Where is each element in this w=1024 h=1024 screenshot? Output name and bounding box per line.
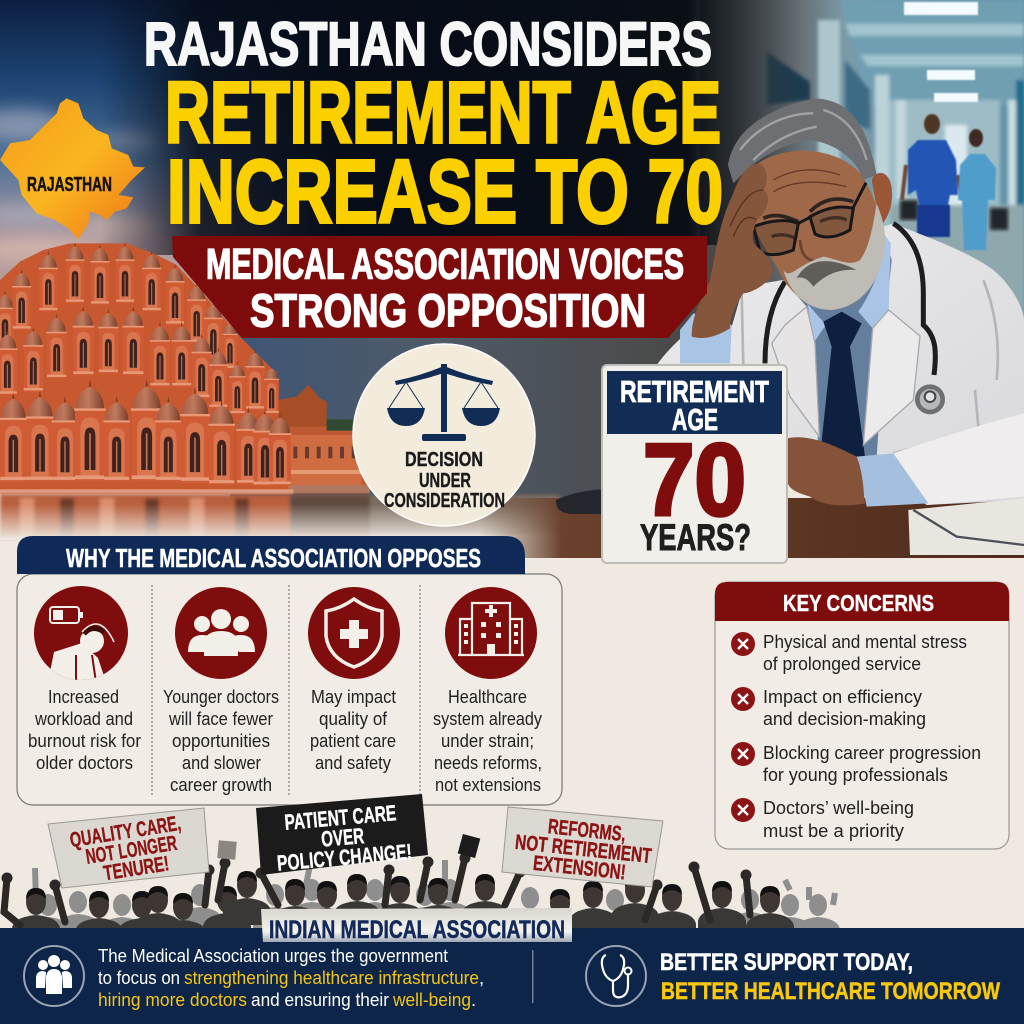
raised arms (4, 858, 750, 925)
sign text: NOT LONGER (84, 832, 179, 869)
concern 2: Impact on efficiency (763, 686, 923, 707)
column: workload (28, 586, 141, 773)
held papers (217, 834, 480, 860)
map label: RAJASTHAN (27, 174, 112, 196)
panel heading: WHY THE MEDICAL ASSOCIATION OPPOSES (66, 543, 481, 573)
icon: scales of justice (387, 364, 500, 441)
protest sign: quality care (48, 808, 209, 890)
key concerns header (715, 582, 1009, 621)
call to action text: The Medical Association urges the government (98, 945, 448, 966)
left sleeve cuff (680, 313, 732, 363)
panel: why the medical association opposes (17, 536, 562, 805)
text: quality of (319, 708, 388, 729)
text: and safety (315, 752, 392, 773)
title line 3: INCREASE TO 70 (167, 142, 723, 242)
concern 4: must be a priority (763, 820, 905, 841)
background: dark title backdrop (100, 0, 800, 255)
shirt (807, 230, 892, 457)
subtitle line 2: STRONG OPPOSITION (250, 284, 646, 336)
sign text: PATIENT CARE (284, 800, 397, 835)
call to action text: well-being (392, 989, 471, 1010)
icon: hospital (445, 587, 537, 679)
concern 1 (731, 631, 967, 674)
call to action text: hiring more doctors (98, 989, 247, 1010)
text: older doctors (36, 752, 133, 773)
eyes (772, 218, 847, 238)
icon: stethoscope in ring (586, 946, 646, 1006)
banner text: INDIAN MEDICAL ASSOCIATION (269, 916, 565, 944)
footer content (24, 945, 1000, 1010)
Rajasthan map (0, 98, 145, 239)
necktie (820, 312, 865, 457)
text: May impact (311, 686, 396, 707)
coat lapels (772, 307, 920, 445)
footer band (0, 928, 1024, 1024)
text: opportunities (172, 730, 270, 751)
key concerns heading: KEY CONCERNS (783, 590, 934, 616)
palace reflection fading to paper (0, 494, 640, 540)
concern 2 (731, 686, 926, 729)
finger lines (730, 190, 763, 237)
text: under strain; (441, 730, 534, 751)
background crowd (26, 860, 840, 945)
concern 3 (731, 742, 981, 785)
papers on desk (908, 498, 1024, 555)
sign text: POLICY CHANGE! (276, 839, 413, 876)
text: Healthcare (448, 686, 527, 707)
subtitle line 1: MEDICAL ASSOCIATION VOICES (206, 240, 684, 288)
right sleeve (893, 413, 1024, 505)
top tier of domed bays (0, 242, 238, 369)
middle tier of domed bays (0, 306, 279, 414)
raised fists (2, 852, 752, 890)
face shadows and wrinkles (773, 170, 847, 262)
decision badge (353, 344, 535, 526)
badge text: UNDER (419, 470, 471, 492)
Hawa Mahal palace (0, 242, 370, 494)
text: burnout risk for (28, 730, 141, 751)
text (163, 686, 279, 795)
protest sign: reforms (502, 807, 663, 887)
call to action text: , (479, 967, 484, 988)
text: Increased (48, 686, 119, 707)
concern 4: Doctors’ well-being (763, 797, 914, 818)
big 70: 70 (643, 423, 746, 537)
sign header text: AGE (672, 402, 718, 437)
call to action text: . (471, 989, 476, 1010)
text: career growth (170, 774, 272, 795)
grey beard (783, 203, 885, 310)
text: Younger doctors (163, 686, 279, 707)
phone on desk (556, 489, 604, 514)
call to action text: strengthening healthcare infrastructure (184, 967, 479, 988)
blurred nurse in light blue scrubs (958, 129, 996, 250)
panel header (17, 536, 525, 580)
subtitle banner (172, 236, 707, 338)
text (28, 686, 141, 773)
doctor (657, 98, 1024, 555)
sign text (68, 812, 188, 890)
title line 1: RAJASTHAN CONSIDERS (144, 10, 712, 78)
text (433, 686, 543, 795)
retirement age sign (602, 365, 787, 563)
concern 3: Blocking career progression (763, 742, 981, 763)
concern 2: and decision-making (763, 708, 926, 729)
protesters front row (12, 871, 794, 947)
badge text: CONSIDERATION (384, 490, 505, 512)
sign text (273, 799, 413, 876)
text: will face fewer (168, 708, 273, 729)
palace wall silhouette (0, 243, 370, 493)
stethoscope (765, 223, 943, 412)
background: Jaipur sky (0, 0, 400, 400)
call to action text: and ensuring their (251, 989, 389, 1010)
sign text: QUALITY CARE, (68, 812, 183, 852)
shirt collars (808, 235, 891, 343)
resting fist (787, 437, 865, 505)
sign text: NOT RETIREMENT (514, 831, 653, 868)
title line 2: RETIREMENT AGE (165, 64, 721, 162)
eyebrows (763, 199, 853, 222)
text: not extensions (435, 774, 541, 795)
text: patient care (310, 730, 396, 751)
coat folds (742, 280, 1003, 453)
concern 1: Physical and mental stress (763, 631, 967, 652)
sign text: REFORMS, (547, 815, 627, 846)
sign header (607, 371, 782, 434)
sign header text: RETIREMENT (620, 374, 769, 409)
sign text: OVER (320, 823, 365, 852)
column: young doctors (163, 587, 279, 795)
badge text: DECISION (405, 449, 483, 471)
concern 3: for young professionals (763, 764, 948, 785)
right cuff (857, 453, 928, 507)
call to action text: to focus on (98, 967, 180, 988)
sign text: EXTENSION! (532, 852, 627, 884)
icon: shield with cross (308, 587, 400, 679)
text (310, 686, 396, 773)
icon: burnout (34, 586, 128, 682)
icon: three people (175, 587, 267, 679)
text: system already (433, 708, 543, 729)
badge text (384, 449, 505, 512)
background: dusk behind doctor (230, 245, 730, 520)
slogan line 1: BETTER SUPPORT TODAY, (660, 949, 913, 976)
grey hair (728, 98, 877, 183)
title (144, 10, 723, 242)
desk (480, 498, 1024, 558)
icon: people in ring (24, 946, 84, 1006)
head (750, 151, 884, 310)
sign text (512, 812, 655, 887)
sign text: TENURE! (102, 852, 171, 885)
blurred nurse in dark blue scrubs (902, 114, 962, 237)
concern 4 (731, 797, 914, 841)
glasses (753, 183, 866, 255)
years question: YEARS? (640, 517, 751, 558)
ear (872, 173, 892, 227)
hair highlights (740, 110, 867, 160)
sign header text (620, 374, 769, 437)
column: healthcare system (433, 587, 543, 795)
text: and slower (182, 752, 261, 773)
text: needs reforms, (434, 752, 542, 773)
association banner (261, 908, 572, 944)
concern 1: of prolonged service (763, 653, 921, 674)
call to action text (98, 945, 484, 1010)
bottom tier of domed bays (0, 379, 291, 486)
protest sign: patient care (256, 794, 428, 876)
pen and files (913, 510, 1024, 545)
side wing and pavilion (278, 385, 370, 493)
text: workload and (34, 708, 133, 729)
raised hand (692, 163, 773, 338)
protest crowd (2, 852, 840, 947)
background: hospital corridor (700, 0, 1024, 340)
column: patient care (308, 587, 400, 773)
panel: key concerns (715, 582, 1009, 849)
white coat (657, 223, 1024, 505)
moustache (797, 261, 857, 287)
